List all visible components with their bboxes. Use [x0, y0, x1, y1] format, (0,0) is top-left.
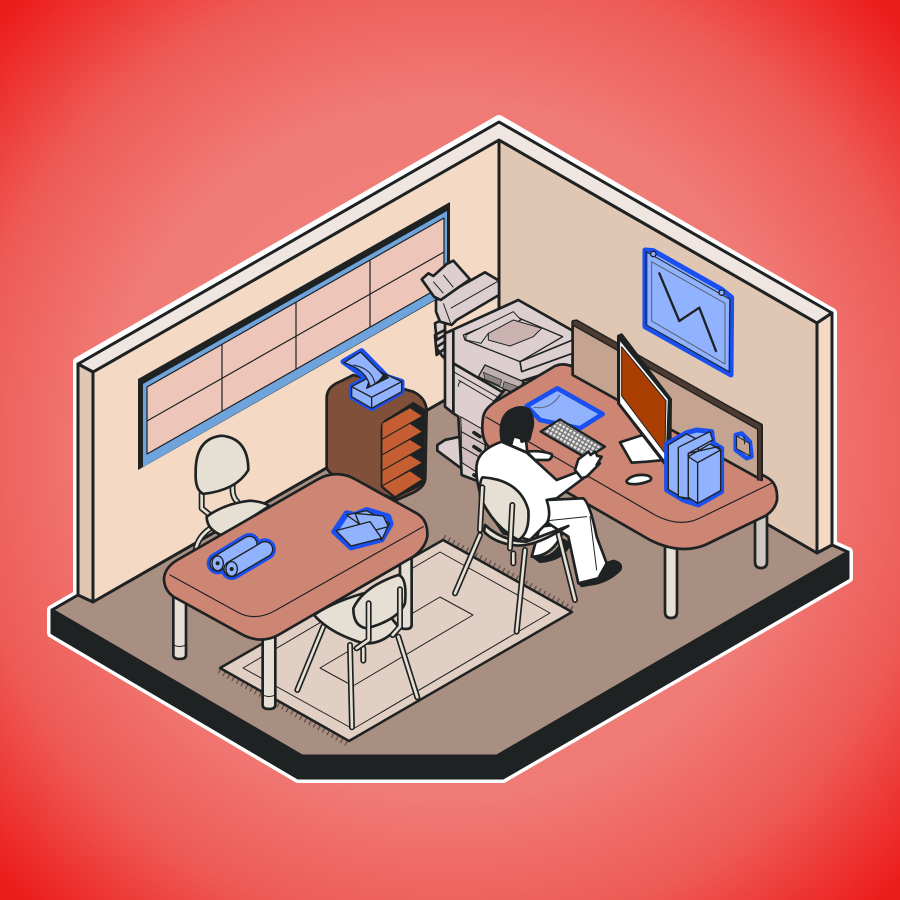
storage cabinet with orange shelves	[327, 375, 427, 500]
copier base	[437, 437, 463, 470]
right desk top	[482, 364, 777, 549]
right wall	[499, 140, 817, 553]
back chair seat	[207, 501, 269, 536]
photocopier	[422, 261, 573, 483]
copier scanner housing	[436, 272, 499, 325]
items on right desk	[527, 320, 762, 505]
torso and arm	[476, 442, 583, 540]
copier control panel	[478, 365, 523, 395]
desk top	[164, 474, 427, 640]
keyboard	[541, 419, 605, 458]
right desk	[482, 364, 777, 618]
white outline of the room	[52, 120, 848, 778]
stack of books	[667, 430, 722, 505]
right wall end	[817, 313, 832, 553]
window	[138, 202, 450, 470]
small clip on divider	[736, 433, 752, 458]
back chair backrest	[196, 436, 248, 494]
left desk	[164, 474, 427, 709]
left wall end	[78, 364, 93, 602]
front chair legs	[297, 627, 417, 727]
right desk legs	[665, 540, 677, 618]
front chair seat	[314, 592, 398, 643]
window panes	[147, 218, 444, 454]
monitor	[618, 335, 671, 467]
hair	[501, 407, 533, 443]
blue document tray	[527, 388, 603, 428]
right hand	[575, 452, 602, 478]
back chair	[196, 436, 269, 550]
wall top cap	[78, 122, 832, 372]
left hand	[527, 451, 552, 460]
rug	[219, 537, 573, 745]
copier side trays	[435, 318, 445, 358]
copier paper feeder	[422, 261, 470, 300]
monitor stand	[620, 435, 665, 463]
desk legs	[173, 557, 412, 709]
printer on cabinet	[343, 351, 402, 408]
left wall	[93, 140, 499, 602]
far trouser leg	[532, 523, 568, 557]
mouse	[627, 475, 651, 484]
floor slab	[52, 369, 848, 778]
near trouser leg	[545, 498, 607, 583]
copier lower body and drawers	[453, 362, 503, 483]
scattered papers	[334, 510, 391, 547]
poster with falling line chart	[645, 250, 732, 375]
shoes	[533, 540, 570, 562]
desk divider	[573, 322, 762, 480]
copier upper body	[445, 300, 573, 392]
walls	[78, 122, 832, 602]
copier drawer handles	[474, 433, 480, 479]
copier document tray	[463, 315, 563, 362]
collar	[502, 433, 527, 453]
front chair	[297, 575, 417, 727]
paper rolls	[212, 544, 265, 576]
seated man on chair	[455, 407, 621, 632]
chair under man	[455, 477, 575, 632]
front chair backrest	[353, 575, 405, 628]
